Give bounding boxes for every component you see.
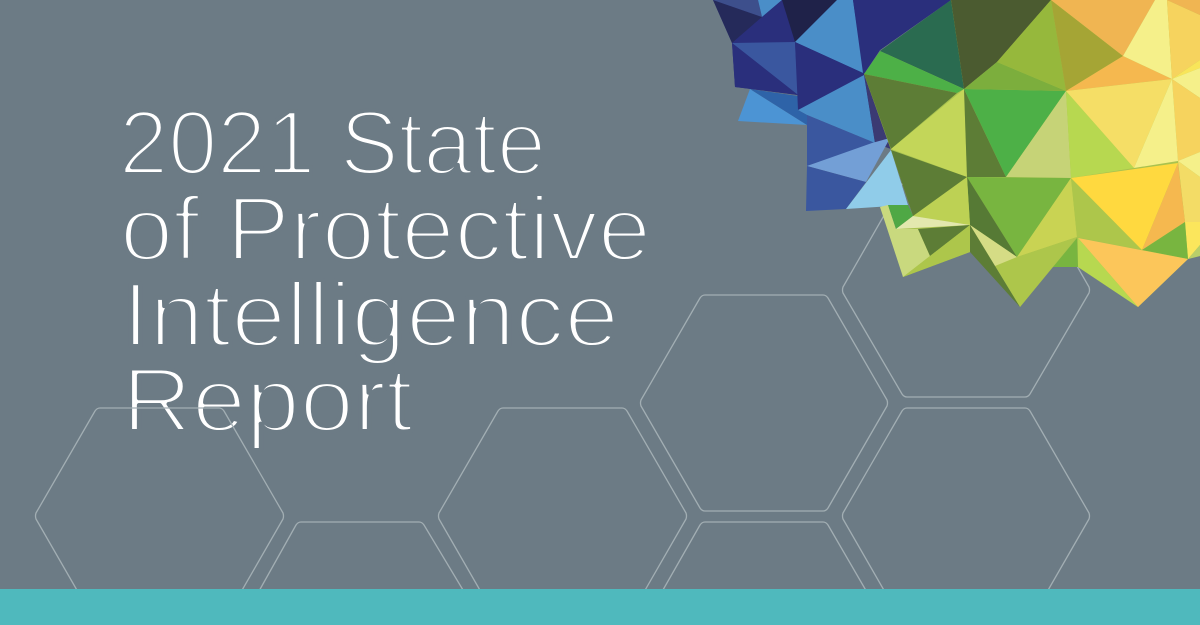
polygon cluster illustration — [713, 0, 1200, 307]
blue facets — [713, 0, 951, 211]
title: of Protective — [120, 179, 651, 280]
yellow and orange facets — [1051, 0, 1200, 307]
title: Report — [122, 350, 413, 451]
title: 2021 State — [119, 93, 546, 194]
title — [119, 93, 651, 451]
bottom teal band — [0, 589, 1200, 625]
title: Intelligence — [122, 265, 619, 366]
hexagon outline pattern — [36, 181, 1090, 625]
green facets — [864, 0, 1200, 307]
